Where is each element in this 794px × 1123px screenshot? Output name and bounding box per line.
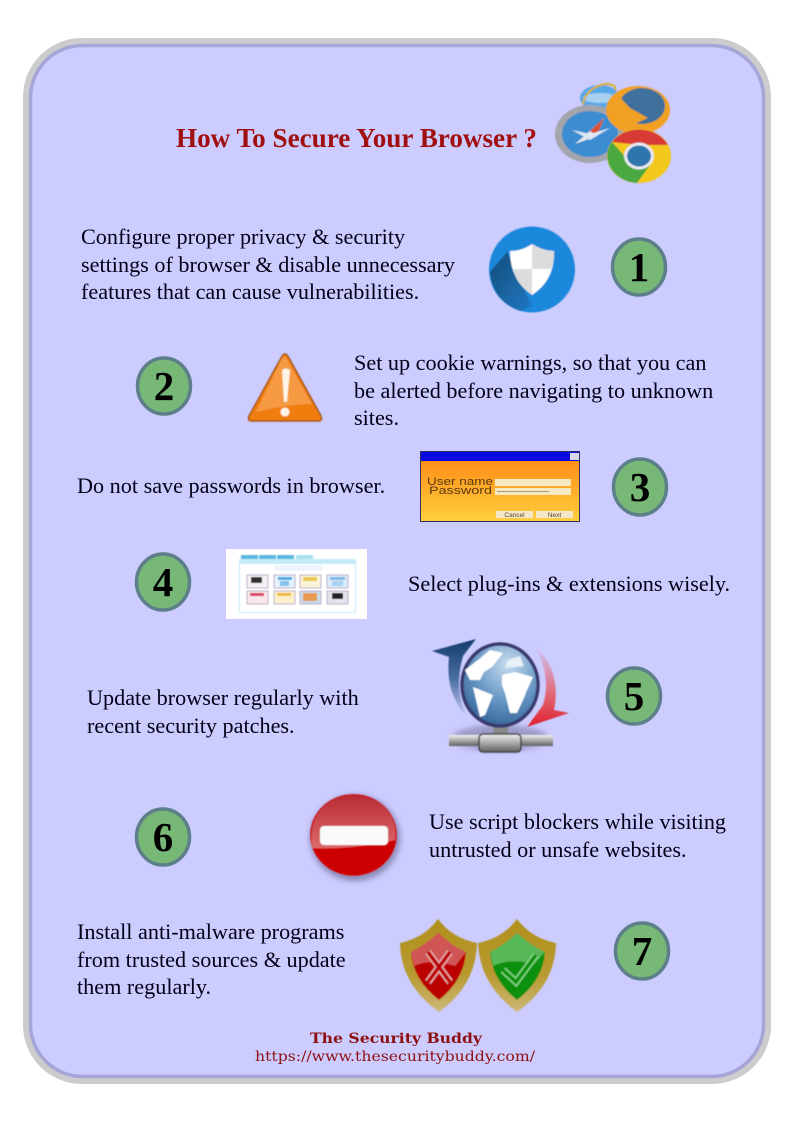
text: step 5: Update browser regularly with	[87, 685, 359, 710]
text: step 7	[77, 919, 346, 999]
text: step 7: Install anti-malware programs	[77, 919, 344, 944]
text: step 6: Use script blockers while visiting	[429, 809, 726, 834]
text: step 1: settings of browser & disable unnecessary	[81, 252, 455, 277]
badge: number 1: 1	[629, 244, 649, 290]
icon: login dialog: User name	[427, 476, 493, 488]
text: step 2: sites.	[354, 405, 399, 430]
icon: login dialog	[420, 452, 580, 522]
text: step 6: untrusted or unsafe websites.	[429, 837, 687, 862]
badge: number 7	[616, 923, 668, 979]
badge: number 7: 7	[632, 928, 652, 974]
text: step 3: Do not save passwords in browser.	[77, 473, 385, 498]
icon: no-entry sign	[310, 794, 400, 881]
text: step 2	[354, 350, 713, 430]
text: step 6	[429, 809, 726, 862]
icon: warning triangle	[248, 354, 322, 421]
text: step 2: Set up cookie warnings, so that you can	[354, 350, 706, 375]
footer: brand and URL	[255, 1031, 535, 1065]
badge: number 3	[614, 459, 666, 515]
badge: number 2	[138, 358, 190, 414]
text: step 5	[87, 685, 359, 738]
badge: number 5	[608, 668, 660, 724]
text: step 4: Select plug-ins & extensions wisely.	[408, 571, 730, 596]
badge: number 2: 2	[154, 363, 174, 409]
text: step 1: Configure proper privacy & security	[81, 224, 405, 249]
footer: brand and URL: The Security Buddy	[310, 1031, 483, 1047]
text: step 2: be alerted before navigating to unknown	[354, 378, 713, 403]
badge: number 1	[612, 239, 666, 295]
text: step 5: recent security patches.	[87, 713, 295, 738]
icon: login dialog: Cancel	[504, 512, 525, 519]
badge: number 3: 3	[630, 464, 650, 510]
badge: number 4: 4	[153, 559, 173, 605]
icon: login dialog: Next	[548, 512, 561, 519]
text: step 1: features that can cause vulnerabilities.	[81, 279, 419, 304]
badge: number 6: 6	[153, 814, 173, 860]
icon: red and green shields	[400, 919, 556, 1012]
badge: number 4	[136, 554, 190, 610]
badge: number 5: 5	[624, 673, 644, 719]
text: step 7: them regularly.	[77, 974, 211, 999]
icon: browser logos	[555, 84, 671, 183]
text: step 7: from trusted sources & update	[77, 947, 346, 972]
text: step 1	[81, 224, 455, 304]
icon: browser extensions window	[226, 549, 367, 619]
title: How To Secure Your Browser ?	[176, 123, 537, 153]
footer: brand and URL: https://www.thesecuritybuddy.com/	[255, 1049, 535, 1065]
icon: globe with update arrows	[432, 639, 569, 752]
icon: blue shield	[489, 226, 575, 312]
badge: number 6	[136, 809, 190, 865]
icon: login dialog: Password	[429, 485, 492, 497]
